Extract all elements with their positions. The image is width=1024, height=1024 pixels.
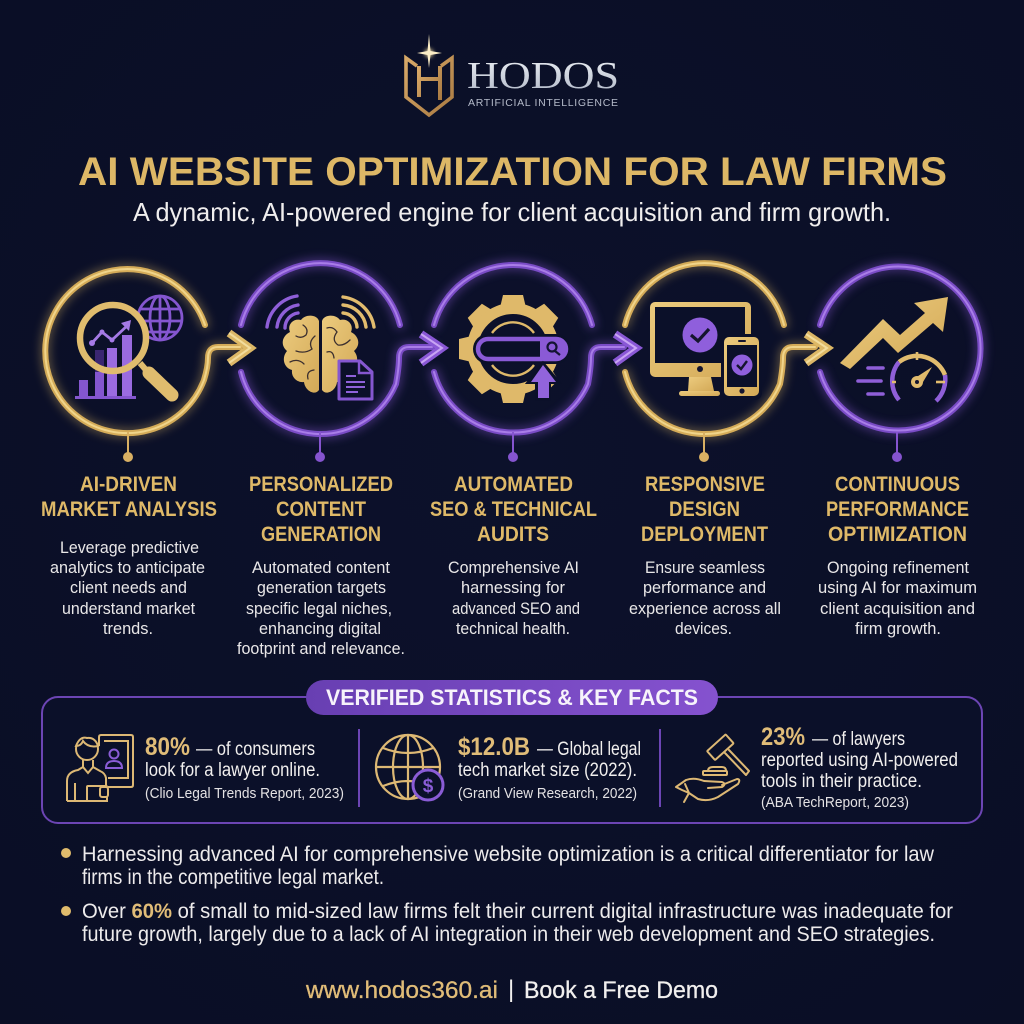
ring and arrow: gold	[45, 269, 250, 433]
description: analytics to anticipate	[50, 559, 205, 577]
icon: globe with dollar	[376, 735, 443, 800]
description: understand market	[62, 600, 195, 618]
stat: 23 percent: (ABA TechReport, 2023)	[761, 795, 909, 811]
icon: monitor and phone	[650, 302, 762, 400]
panel: verified statistics	[42, 680, 982, 823]
heading: GENERATION	[261, 523, 381, 546]
wordmark: HODOS	[467, 55, 619, 97]
icon: gavel over hand	[676, 734, 749, 802]
stat: 12.0B: $12.0B	[458, 733, 530, 761]
description: firm growth.	[855, 620, 941, 638]
footer: website and call to action: Book a Free Demo	[524, 977, 718, 1004]
heading: RESPONSIVE	[645, 473, 765, 496]
connector	[699, 432, 709, 462]
description: Automated content	[252, 559, 390, 577]
heading: AUDITS	[477, 523, 549, 546]
description: client acquisition and	[820, 600, 975, 618]
bullet: differentiator	[61, 843, 935, 889]
heading: PERFORMANCE	[826, 498, 969, 521]
description: using AI for maximum	[818, 579, 977, 597]
description: technical health.	[456, 620, 570, 638]
step 5: performance optimization	[818, 266, 981, 638]
step 2: content generation	[237, 263, 442, 658]
description	[448, 559, 580, 638]
heading: CONTENT	[276, 498, 366, 521]
icon: globe with dollar: $	[423, 776, 434, 797]
logo: Hodos	[406, 34, 619, 115]
description: experience across all	[629, 600, 781, 618]
divider right	[659, 729, 661, 807]
heading	[430, 473, 597, 546]
heading	[641, 473, 768, 546]
icon: magnifier, chart and globe	[75, 296, 182, 399]
stat: 80 percent	[145, 733, 344, 802]
stat: 80 percent: — of consumers	[196, 739, 315, 760]
step 4: responsive design	[625, 263, 827, 638]
stat: 23 percent: reported using AI-powered	[761, 750, 958, 771]
heading: SEO & TECHNICAL	[430, 498, 597, 521]
connector	[315, 432, 325, 462]
heading: AI-DRIVEN	[80, 473, 177, 496]
stat: 80 percent: (Clio Legal Trends Report, 2023)	[145, 786, 344, 802]
heading: DESIGN	[669, 498, 740, 521]
stat: 80 percent: look for a lawyer online.	[145, 760, 320, 781]
heading	[826, 473, 969, 546]
heading: AUTOMATED	[454, 473, 573, 496]
icon: brain with signal waves and document	[267, 296, 374, 399]
panel frame	[42, 697, 982, 823]
icon: shield with H and star	[406, 34, 452, 115]
bullet: differentiator: Harnessing advanced AI for comprehensive website optimization is a critical differentiator for law	[82, 843, 935, 866]
description: harnessing for	[461, 579, 565, 597]
description: specific legal niches,	[246, 600, 392, 618]
stat: 12.0B: — Global legal	[537, 739, 641, 760]
ring and arrow: purple	[434, 265, 636, 433]
title: AI WEBSITE OPTIMIZATION FOR LAW FIRMS	[78, 150, 947, 194]
pill heading	[306, 680, 718, 715]
description	[237, 559, 405, 658]
divider left	[358, 729, 360, 807]
icon: gear with search bar and up arrow	[459, 295, 571, 403]
heading: DEPLOYMENT	[641, 523, 768, 546]
ring: purple	[820, 266, 981, 431]
pill heading: VERIFIED STATISTICS & KEY FACTS	[326, 685, 698, 710]
heading	[41, 473, 217, 521]
subtitle: A dynamic, AI-powered engine for client acquisition and firm growth.	[133, 197, 891, 227]
stat: 23 percent: 23%	[761, 723, 805, 751]
step 3: SEO audits	[430, 265, 636, 638]
step 1: market analysis	[41, 269, 250, 638]
stat: 23 percent: tools in their practice.	[761, 771, 922, 792]
stat: 23 percent	[761, 723, 958, 811]
bullet: differentiator: firms in the competitive legal market.	[82, 866, 384, 889]
description	[818, 559, 977, 638]
bullet: digital infrastructure	[61, 900, 953, 946]
description: advanced SEO and	[452, 600, 580, 618]
description	[629, 559, 781, 638]
footer: website and call to action: |	[508, 976, 514, 1003]
footer: website and call to action	[305, 976, 718, 1004]
heading	[249, 473, 393, 546]
heading: PERSONALIZED	[249, 473, 393, 496]
connector	[123, 432, 133, 462]
stat: 80 percent: 80%	[145, 733, 190, 761]
description: generation targets	[257, 579, 386, 597]
footer: website and call to action: www.hodos360.ai	[305, 977, 498, 1004]
ring and arrow: purple	[241, 263, 442, 434]
heading: OPTIMIZATION	[828, 523, 967, 546]
heading: MARKET ANALYSIS	[41, 498, 217, 521]
heading: CONTINUOUS	[835, 473, 960, 496]
description: devices.	[675, 620, 732, 638]
description: Comprehensive AI	[448, 559, 579, 577]
description	[50, 539, 205, 638]
icon: growth arrow and speedometer	[840, 297, 948, 401]
description: performance and	[643, 579, 766, 597]
description: trends.	[103, 620, 153, 638]
stat: 12.0B: tech market size (2022).	[458, 760, 637, 781]
icon: person with tablet	[67, 735, 133, 801]
connector	[892, 432, 902, 462]
description: footprint and relevance.	[237, 640, 405, 658]
description: client needs and	[70, 579, 187, 597]
bullet: digital infrastructure: Over 60% of small to mid-sized law firms felt their current digital infrastructure was inadequate for	[82, 900, 953, 923]
description: Ongoing refinement	[827, 559, 969, 577]
description: enhancing digital	[259, 620, 381, 638]
ring and arrow: gold	[625, 263, 827, 434]
stat: 23 percent: — of lawyers	[812, 729, 905, 750]
stat: 12.0B	[458, 733, 641, 802]
connector	[508, 432, 518, 462]
description: Leverage predictive	[60, 539, 199, 557]
tagline: ARTIFICIAL INTELLIGENCE	[468, 97, 618, 109]
stat: 12.0B: (Grand View Research, 2022)	[458, 786, 637, 802]
description: Ensure seamless	[645, 559, 765, 577]
bullet: digital infrastructure: future growth, largely due to a lack of AI integration in their web development and SEO strategies.	[82, 923, 935, 946]
